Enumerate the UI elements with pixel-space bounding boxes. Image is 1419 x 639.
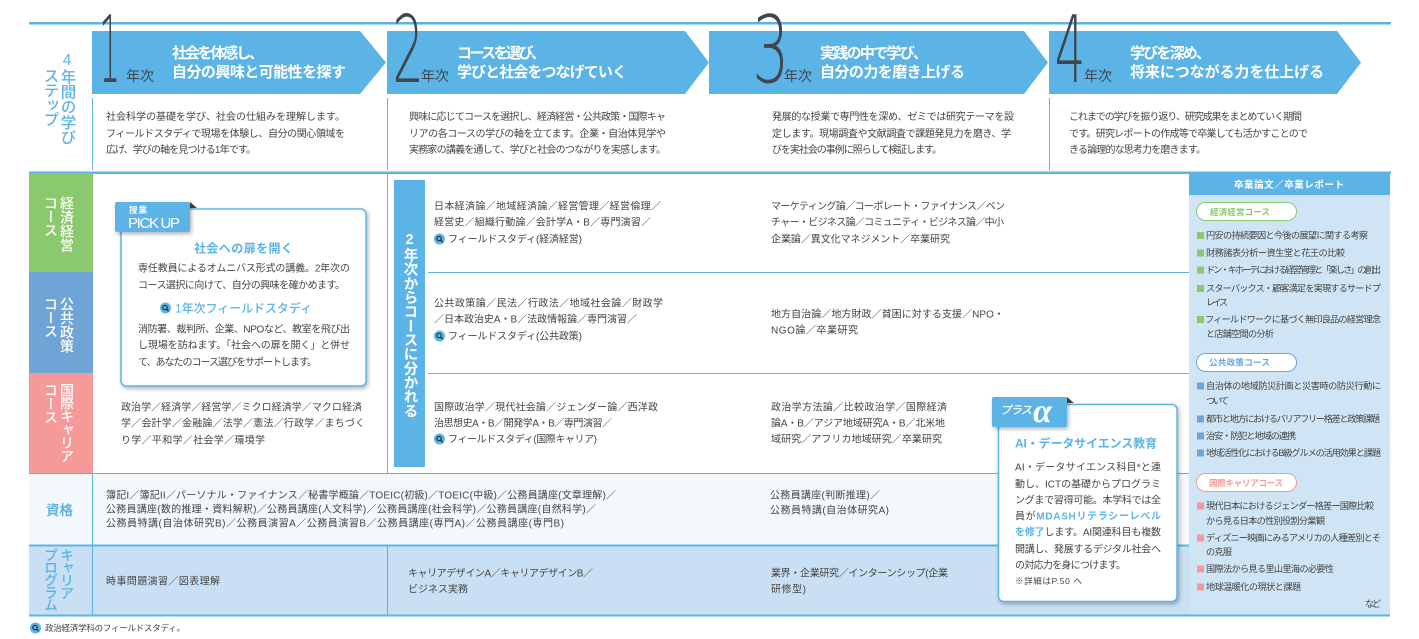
course tab: 公共政策コース: 公共政策 xyxy=(59,297,75,354)
year 3 subjects: 国際キャリア xyxy=(771,400,947,446)
qualifications list: 公務員講座(数的推理・資料解釈)／公務員講座(人文科学)／公務員講座(社会科学)／公務員講座(自然科学)／ xyxy=(106,502,596,516)
step 4 arrow xyxy=(1049,0,1361,105)
pill: 経済経営コース: 経済経営コース xyxy=(1210,207,1270,217)
panel: PICK UP: て、あなたのコース選びをサポートします。 xyxy=(138,356,317,368)
row label: 資格: 資格 xyxy=(46,502,74,518)
step 4 arrow: 学びを深め、 xyxy=(1130,44,1211,62)
theses list: 国際キャリア: の克服 xyxy=(1206,547,1232,557)
year 2 subjects: 経済経営: 経営史／組織行動論／会計学A・B／専門演習／ xyxy=(434,216,651,228)
step 1 arrow: 年次 xyxy=(126,68,154,84)
panel: プラスα: の対応力を身につけます。 xyxy=(1015,558,1126,572)
row label: キャリアプログラム: キャリア xyxy=(59,548,75,600)
step 1 arrow: 自分の興味と可能性を探す xyxy=(172,63,346,81)
step 1 description: 広げ、学びの軸を見つける1年です。 xyxy=(106,143,256,156)
theses list: 経済経営: と店舗空間の分析 xyxy=(1206,328,1274,339)
theses list: 国際キャリア: など xyxy=(1365,599,1381,609)
step 3 description xyxy=(772,110,1014,156)
year 2 subjects: 公共政策: フィールドスタディ(公共政策) xyxy=(448,330,582,342)
year 1 subjects: 学／会計学／金融論／法学／憲法／行政学／まちづく xyxy=(121,416,365,430)
theses list: 公共政策: 都市と地方におけるバリアフリー格差と政策課題 xyxy=(1206,413,1380,424)
step 3 arrow: 年次 xyxy=(784,68,812,84)
theses list: 経済経営: 財務諸表分析ー資生堂と花王の比較 xyxy=(1206,247,1345,258)
qualifications list: 公務員特講(自治体研究B)／公務員演習A／公務員演習B／公務員講座(専門A)／公務員講座(専門B) xyxy=(106,516,564,530)
theses list: 公共政策: 治安・防犯と地域の連携 xyxy=(1206,430,1296,441)
pill: 経済経営コース xyxy=(1196,202,1296,220)
qualifications list xyxy=(106,488,889,530)
course tab: 国際キャリアコース xyxy=(29,373,93,473)
career program list: 研修型) xyxy=(771,582,806,596)
step 4 description: きる論理的な思考力を磨きます。 xyxy=(1069,143,1206,156)
footnote: 政治経済学科のフィールドスタディ。 xyxy=(45,623,185,633)
step 4 description: です。研究レポートの作成等で卒業しても活かすことので xyxy=(1069,127,1308,140)
side heading: 4年間の学びステップ xyxy=(42,52,76,145)
step 3 description: 定します。現場調査や文献調査で課題発見力を磨き、学 xyxy=(772,127,1011,140)
theses list: 経済経営: スターバックス・顧客満足を実現するサードプ xyxy=(1206,282,1382,294)
step 1 description: 社会科学の基礎を学び、社会の仕組みを理解します。 xyxy=(106,110,345,123)
theses list: 公共政策 xyxy=(1197,380,1381,458)
year 3 subjects: 国際キャリア: 論A・B／アジア地域研究A・B／北米地 xyxy=(771,416,945,430)
year 3 subjects: 経済経営: 企業論／異文化マネジメント／卒業研究 xyxy=(771,232,950,246)
theses list: 経済経営: レイス xyxy=(1206,298,1228,308)
panel: 卒業論文／卒業レポート xyxy=(1189,172,1390,609)
panel: 卒業論文／卒業レポート: 卒業論文／卒業レポート xyxy=(1234,179,1344,191)
pill: 公共政策コース: 公共政策コース xyxy=(1209,358,1270,368)
panel: PICK UP: 消防署、裁判所、企業、NPOなど、教室を飛び出 xyxy=(138,322,350,336)
step 2 description: 実務家の講義を通して、学びと社会のつながりを実感します。 xyxy=(409,143,666,156)
theses list: 国際キャリア: 地球温暖化の現状と課題 xyxy=(1206,581,1301,592)
course tab: 経済経営コース: コース xyxy=(43,196,59,237)
side heading: 4年間の学びステップ: ステップ xyxy=(42,68,58,127)
pill: 国際キャリアコース: 国際キャリアコース xyxy=(1209,478,1283,488)
year 2 subjects: 国際キャリア: 治思想史A・B／開発学A・B／専門演習／ xyxy=(434,416,612,430)
pill: 国際キャリアコース xyxy=(1196,474,1296,492)
year 3 subjects: 公共政策 xyxy=(771,308,1004,336)
theses list: 国際キャリア: から見る日本の性別役割分業観 xyxy=(1206,515,1325,526)
career program list: 時事問題演習／図表理解 xyxy=(106,574,220,588)
step 3 arrow: 実践の中で学び、 xyxy=(820,44,928,62)
career program list: ビジネス実務 xyxy=(408,582,468,596)
course tab: 公共政策コース xyxy=(29,272,93,373)
theses list: 公共政策: 地域活性化におけるB級グルメの活用効果と課題 xyxy=(1206,447,1381,458)
year 3 subjects: 国際キャリア: 域研究／アフリカ地域研究／卒業研究 xyxy=(771,432,942,446)
step 4 arrow: 年次 xyxy=(1084,68,1112,84)
year 2 subjects: 経済経営 xyxy=(434,200,661,246)
step 3 description: 発展的な授業で専門性を深め、ゼミでは研究テーマを設 xyxy=(772,110,1014,123)
step 2 description: リアの各コースの学びの軸を立てます。企業・自治体見学や xyxy=(409,127,666,140)
row label: キャリアプログラム xyxy=(43,548,75,612)
banner: 2年次からコースに分かれる: 2年次からコースに分かれる xyxy=(402,232,418,418)
theses list: 国際キャリア: ディズニー映画にみるアメリカの人種差別とそ xyxy=(1206,532,1381,543)
year 2 subjects: 国際キャリア: フィールドスタディ(国際キャリア) xyxy=(448,432,597,446)
career program list xyxy=(106,566,948,596)
panel: PICK UP: コース選択に向けて、自分の興味を確かめます。 xyxy=(138,278,345,292)
step 3 arrow xyxy=(709,0,1048,105)
panel: PICK UP: 授業 xyxy=(129,205,147,215)
panel: プラスα: を修了します。AI関連科目も複数 xyxy=(1015,526,1161,538)
step 1 description xyxy=(106,110,345,156)
panel: プラスα: AI・データサイエンス教育 xyxy=(1015,436,1157,450)
panel: PICK UP xyxy=(115,202,366,386)
theses list: 公共政策: 自治体の地域防災計画と災害時の防災行動に xyxy=(1206,380,1381,391)
step 4 arrow: 将来につながる力を仕上げる xyxy=(1130,63,1324,81)
theses list: 国際キャリア: 国際法から見る里山里海の必要性 xyxy=(1206,563,1334,574)
row label: キャリアプログラム: プログラム xyxy=(43,548,59,612)
panel: プラスα: 動し、ICTの基礎からプログラミ xyxy=(1015,478,1161,490)
panel: プラスα: ングまで習得可能。本学科では全 xyxy=(1015,494,1161,506)
year 1 subjects: り学／平和学／社会学／環境学 xyxy=(121,434,265,446)
theses list: 国際キャリア xyxy=(1197,500,1381,609)
year 3 subjects: 経済経営 xyxy=(771,200,1005,246)
year 3 subjects: 経済経営: マーケティング論／コーポレート・ファイナンス／ベン xyxy=(771,200,1005,212)
banner: 2年次からコースに分かれる xyxy=(394,180,425,467)
year 2 subjects: 経済経営: フィールドスタディ(経済経営) xyxy=(448,232,582,246)
theses list: 経済経営 xyxy=(1197,230,1382,339)
step 1 arrow xyxy=(92,0,386,105)
year 2 subjects: 公共政策: 公共政策論／民法／行政法／地域社会論／財政学 xyxy=(434,296,663,310)
year 1 subjects: 政治学／経済学／経営学／ミクロ経済学／マクロ経済 xyxy=(121,400,362,414)
panel: PICK UP: 社会への扉を開く xyxy=(194,240,293,256)
panel: PICK UP: 専任教員によるオムニバス形式の講義。2年次の xyxy=(138,262,350,274)
year 3 subjects: 国際キャリア: 政治学方法論／比較政治学／国際経済 xyxy=(771,400,947,414)
year 2 subjects: 国際キャリア xyxy=(434,400,658,446)
step 2 arrow xyxy=(387,0,709,104)
course tab: 国際キャリアコース: 国際キャリア xyxy=(59,383,75,463)
side heading: 4年間の学びステップ: 4年間の学び xyxy=(58,52,76,145)
step 2 arrow: 年次 xyxy=(421,68,449,84)
step 2 description xyxy=(409,110,666,156)
year 2 subjects: 公共政策: ／日本政治史A・B／法政情報論／専門演習／ xyxy=(434,312,637,326)
year 1 subjects xyxy=(121,400,365,446)
theses list: 経済経営: ドン・キホーテにおける経営管理と「楽しさ」の創出 xyxy=(1206,264,1381,275)
year 2 subjects: 公共政策 xyxy=(434,296,663,342)
step 3 arrow: 自分の力を磨き上げる xyxy=(820,63,965,81)
year 2 subjects: 経済経営: 日本経済論／地域経済論／経営管理／経営倫理／ xyxy=(434,200,661,212)
qualifications list: 公務員講座(判断推理)／ xyxy=(770,488,880,502)
qualifications list: 簿記I／簿記II／パーソナル・ファイナンス／秘書学概論／TOEIC(初級)／TOEIC(中級)／公務員講座(文章理解)／ xyxy=(106,488,616,502)
step 2 description: 興味に応じてコースを選択し、経済経営・公共政策・国際キャ xyxy=(409,110,666,123)
theses list: 公共政策: ついて xyxy=(1206,396,1229,406)
panel: プラスα xyxy=(992,393,1177,602)
panel: PICK UP: PICK UP xyxy=(128,215,180,232)
step 1 arrow: 社会を体感し、 xyxy=(172,44,264,62)
panel: プラスα: プラス xyxy=(1000,404,1032,417)
step 4 description xyxy=(1069,110,1308,156)
step 4 description: これまでの学びを振り返り、研究成果をまとめていく期間 xyxy=(1069,110,1302,123)
panel: プラスα: AI・データサイエンス科目*と連 xyxy=(1015,460,1161,474)
panel: PICK UP: 1年次フィールドスタディ xyxy=(175,300,312,316)
career program list: 業界・企業研究／インターンシップ(企業 xyxy=(771,566,948,580)
panel: プラスα: α xyxy=(1033,393,1053,430)
theses list: 経済経営: フィールドワークに基づく無印良品の経営理念 xyxy=(1205,314,1381,324)
career program list: キャリアデザインA／キャリアデザインB／ xyxy=(408,566,593,580)
year 3 subjects: 公共政策: 地方自治論／地方財政／貧困に対する支援／NPO・ xyxy=(771,308,1004,320)
panel: プラスα: 開講し、発展するデジタル社会へ xyxy=(1015,542,1161,556)
qualifications list: 公務員特講(自治体研究A) xyxy=(770,504,889,516)
panel: プラスα: 員がMDASHリテラシーレベル xyxy=(1015,510,1161,522)
course tab: 公共政策コース: コース xyxy=(43,297,59,338)
year 3 subjects: 経済経営: チャー・ビジネス論／コミュニティ・ビジネス論／中小 xyxy=(771,216,1004,228)
step 2 arrow: 学びと社会をつなげていく xyxy=(457,63,627,81)
year 3 subjects: 公共政策: NGO論／卒業研究 xyxy=(771,324,858,336)
panel: PICK UP: し現場を訪ねます。「社会への扉を開く」と併せ xyxy=(138,338,350,352)
pill: 公共政策コース xyxy=(1196,354,1296,372)
course tab: 国際キャリアコース: コース xyxy=(43,383,59,424)
course tab: 経済経営コース xyxy=(29,173,93,272)
step 3 description: びを実社会の事例に照らして検証します。 xyxy=(772,143,942,156)
step 2 arrow: コースを選び、 xyxy=(457,45,546,62)
theses list: 経済経営: 円安の持続要因と今後の展望に関する考察 xyxy=(1206,230,1368,240)
step 1 description: フィールドスタディで現場を体験し、自分の関心領域を xyxy=(106,127,345,140)
panel: プラスα: ※詳細はP.50 へ xyxy=(1015,576,1082,586)
course tab: 経済経営コース: 経済経営 xyxy=(59,196,75,252)
theses list: 国際キャリア: 現代日本におけるジェンダー格差ー国際比較 xyxy=(1206,500,1374,511)
year 2 subjects: 国際キャリア: 国際政治学／現代社会論／ジェンダー論／西洋政 xyxy=(434,400,658,414)
